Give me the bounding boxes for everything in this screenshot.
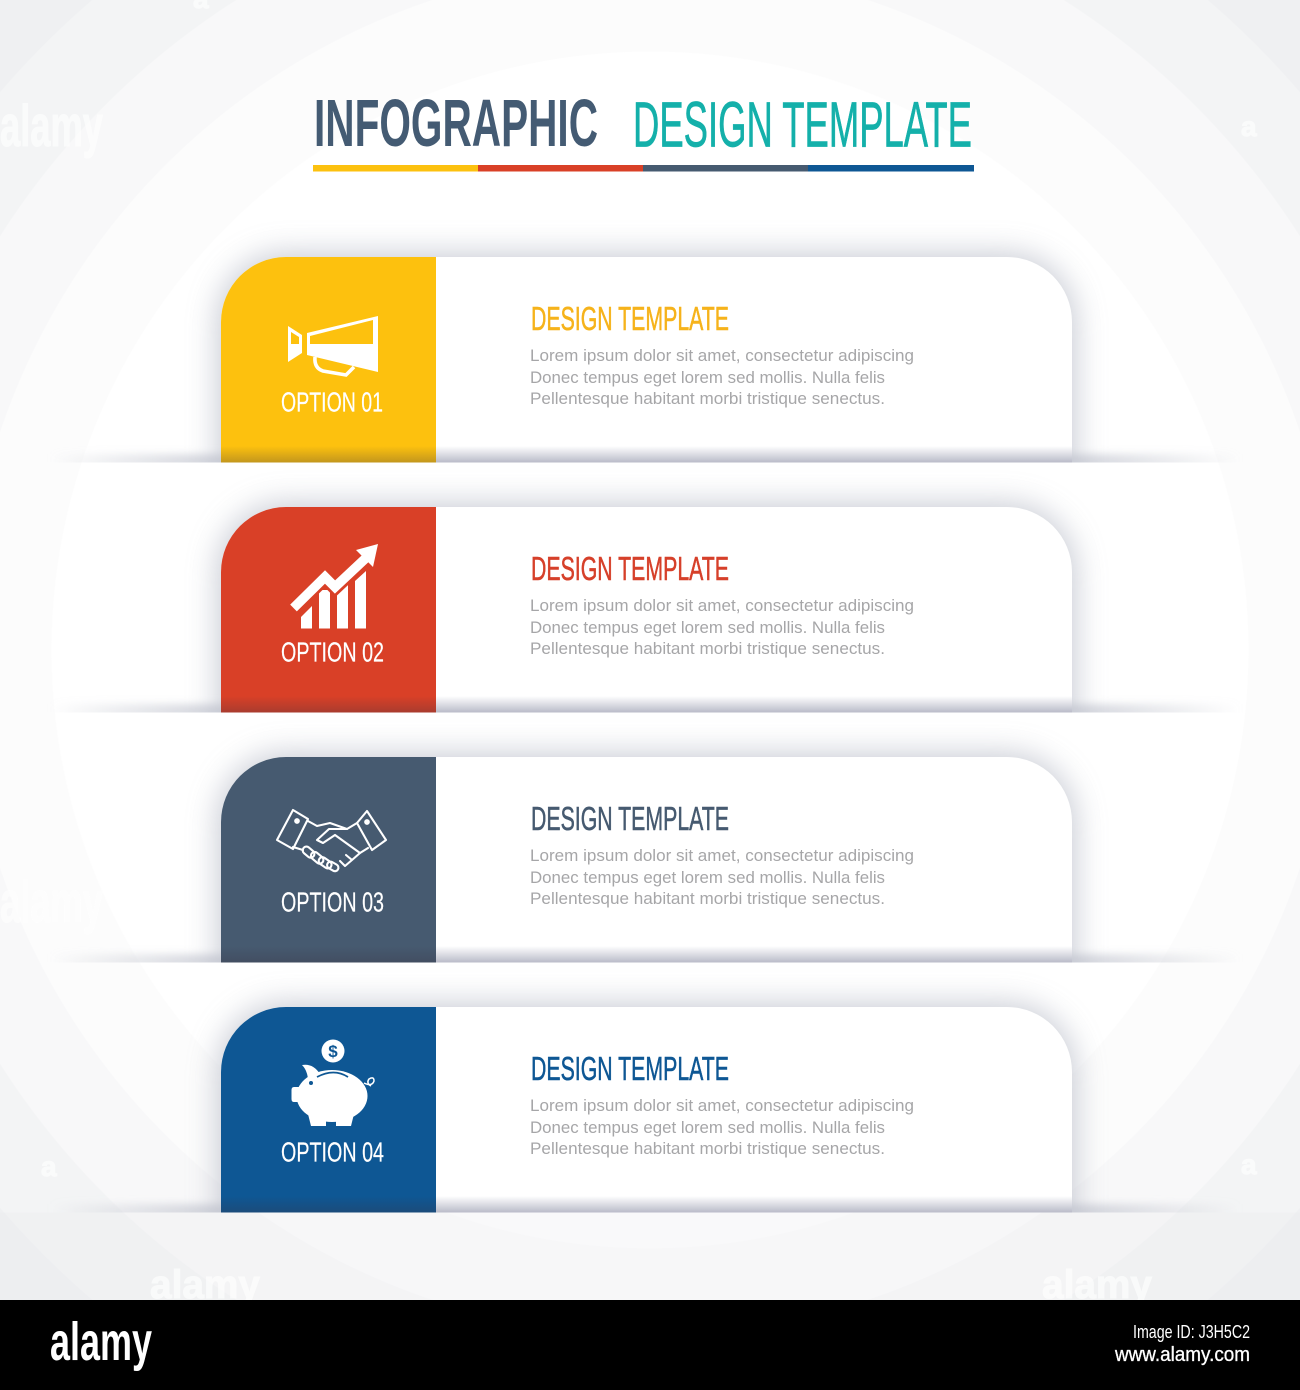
body text: Donec tempus eget lorem sed mollis. Nulla felis: [530, 868, 885, 887]
title: [314, 86, 972, 161]
website: www.alamy.com: [1114, 1344, 1250, 1366]
body text: Lorem ipsum dolor sit amet, consectetur adipiscing: [530, 1096, 914, 1115]
icon: handshake: [277, 810, 386, 872]
body text: Pellentesque habitant morbi tristique senectus.: [530, 889, 885, 908]
watermarks: a: [1241, 1149, 1257, 1180]
icon: piggy bank with coin: $: [328, 1042, 338, 1061]
panel: option 01: [50, 253, 1240, 490]
watermarks: alamy: [0, 870, 103, 935]
watermarks: a: [41, 1151, 57, 1182]
body text: Pellentesque habitant morbi tristique senectus.: [530, 389, 885, 408]
body text: Lorem ipsum dolor sit amet, consectetur adipiscing: [530, 596, 914, 615]
icon: growth chart with arrow: [294, 544, 378, 628]
panel: option 03: [50, 753, 1240, 990]
body text: [530, 596, 914, 658]
title underline: four colours: [313, 165, 974, 172]
body text: [530, 846, 914, 908]
image id: Image ID: J3H5C2: [1133, 1322, 1250, 1342]
footer logo: alamy: [50, 1312, 152, 1372]
body text: Pellentesque habitant morbi tristique senectus.: [530, 639, 885, 658]
title: design template: DESIGN TEMPLATE: [633, 88, 972, 160]
heading: DESIGN TEMPLATE: [531, 800, 729, 837]
label: option 03: OPTION 03: [281, 886, 384, 918]
watermarks: a: [1241, 111, 1257, 142]
label: option 01: OPTION 01: [281, 386, 383, 418]
icon: megaphone: [288, 316, 378, 375]
lower background tint: [0, 1212, 1300, 1300]
body text: [530, 1096, 914, 1158]
heading: DESIGN TEMPLATE: [531, 1050, 729, 1087]
body text: Lorem ipsum dolor sit amet, consectetur adipiscing: [530, 846, 914, 865]
footer bar: [0, 1300, 1300, 1390]
icon: piggy bank with coin: [292, 1040, 374, 1126]
body text: [530, 346, 914, 408]
label: option 04: OPTION 04: [281, 1136, 384, 1168]
label: option 02: OPTION 02: [281, 636, 384, 668]
body text: Donec tempus eget lorem sed mollis. Nulla felis: [530, 368, 885, 387]
body text: Donec tempus eget lorem sed mollis. Nulla felis: [530, 1118, 885, 1137]
panel: option 04: [90, 988, 1200, 1212]
body text: Pellentesque habitant morbi tristique senectus.: [530, 1139, 885, 1158]
heading: DESIGN TEMPLATE: [531, 550, 729, 587]
watermarks: alamy: [1042, 1263, 1153, 1307]
watermarks: alamy: [0, 94, 103, 159]
watermarks: alamy: [150, 1263, 261, 1307]
body text: Lorem ipsum dolor sit amet, consectetur adipiscing: [530, 346, 914, 365]
title: infographic: INFOGRAPHIC: [314, 86, 598, 161]
body text: Donec tempus eget lorem sed mollis. Nulla felis: [530, 618, 885, 637]
heading: DESIGN TEMPLATE: [531, 300, 729, 337]
panel: option 02: [50, 503, 1240, 740]
